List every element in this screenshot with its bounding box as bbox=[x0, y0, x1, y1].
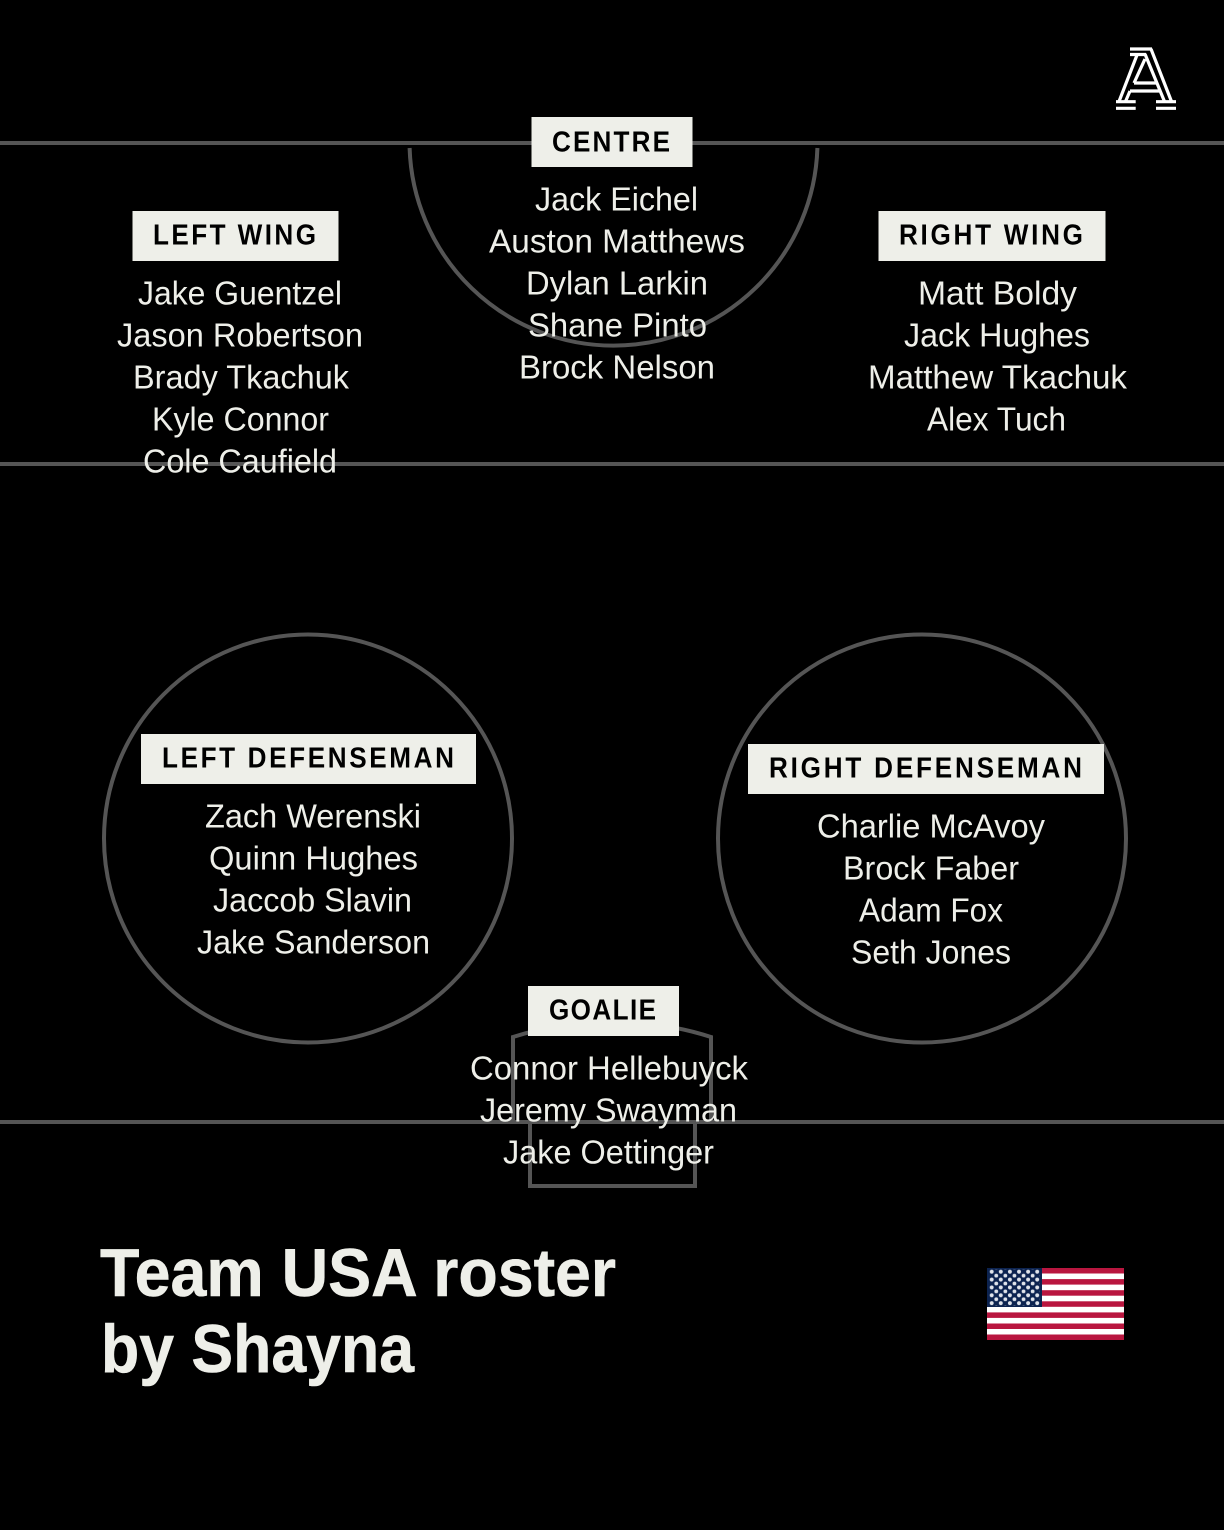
roster: right defenseman: Charlie McAvoy bbox=[817, 808, 1045, 844]
label: left defenseman: LEFT DEFENSEMAN bbox=[162, 741, 454, 774]
roster: centre: Brock Nelson bbox=[519, 348, 715, 386]
title: by Shayna bbox=[101, 1311, 415, 1387]
label: right defenseman bbox=[748, 744, 1104, 794]
roster: left wing: Cole Caufield bbox=[143, 442, 337, 480]
roster: left defenseman bbox=[197, 798, 430, 960]
title bbox=[100, 1235, 616, 1387]
roster: goalie: Jake Oettinger bbox=[503, 1134, 714, 1170]
label: goalie: GOALIE bbox=[549, 993, 656, 1026]
roster: right defenseman: Seth Jones bbox=[851, 934, 1011, 970]
label: right wing bbox=[878, 211, 1106, 261]
roster: goalie bbox=[470, 1050, 748, 1170]
roster: right wing: Matt Boldy bbox=[918, 274, 1077, 312]
roster: right wing: Matthew Tkachuk bbox=[868, 358, 1127, 396]
label: centre: CENTRE bbox=[552, 125, 670, 158]
label: right defenseman: RIGHT DEFENSEMAN bbox=[769, 751, 1082, 784]
roster: left defenseman: Jaccob Slavin bbox=[213, 882, 412, 918]
icon: US flag bbox=[987, 1268, 1124, 1340]
roster: left wing: Kyle Connor bbox=[152, 400, 329, 438]
title: Team USA roster bbox=[100, 1235, 616, 1311]
label: left wing bbox=[132, 211, 338, 261]
roster: right wing: Jack Hughes bbox=[904, 316, 1090, 354]
roster: left wing: Brady Tkachuk bbox=[133, 358, 349, 396]
roster: goalie: Connor Hellebuyck bbox=[470, 1050, 748, 1086]
roster: centre: Shane Pinto bbox=[528, 306, 707, 344]
roster: centre: Dylan Larkin bbox=[526, 264, 708, 302]
roster: left defenseman: Zach Werenski bbox=[205, 798, 421, 834]
label: left defenseman bbox=[141, 734, 476, 784]
roster: right defenseman: Brock Faber bbox=[843, 850, 1019, 886]
roster: left defenseman: Quinn Hughes bbox=[209, 840, 418, 876]
roster: left wing: Jake Guentzel bbox=[138, 274, 342, 312]
roster: centre bbox=[489, 180, 745, 386]
roster: goalie: Jeremy Swayman bbox=[480, 1092, 737, 1128]
roster: centre: Jack Eichel bbox=[535, 180, 698, 218]
roster: right defenseman: Adam Fox bbox=[859, 892, 1003, 928]
roster: left wing bbox=[117, 274, 363, 480]
label: goalie bbox=[528, 986, 679, 1036]
label: right wing: RIGHT WING bbox=[899, 218, 1083, 251]
roster: right wing: Alex Tuch bbox=[927, 400, 1066, 438]
roster: centre: Auston Matthews bbox=[489, 222, 745, 260]
label: centre bbox=[532, 117, 692, 167]
roster: left wing: Jason Robertson bbox=[117, 316, 363, 354]
roster: left defenseman: Jake Sanderson bbox=[197, 924, 430, 960]
roster: right defenseman bbox=[817, 808, 1045, 970]
roster: right wing bbox=[868, 274, 1127, 438]
rink markings bbox=[0, 143, 1224, 1186]
logo: The Athletic A bbox=[1116, 49, 1176, 108]
label: left wing: LEFT WING bbox=[153, 218, 316, 251]
